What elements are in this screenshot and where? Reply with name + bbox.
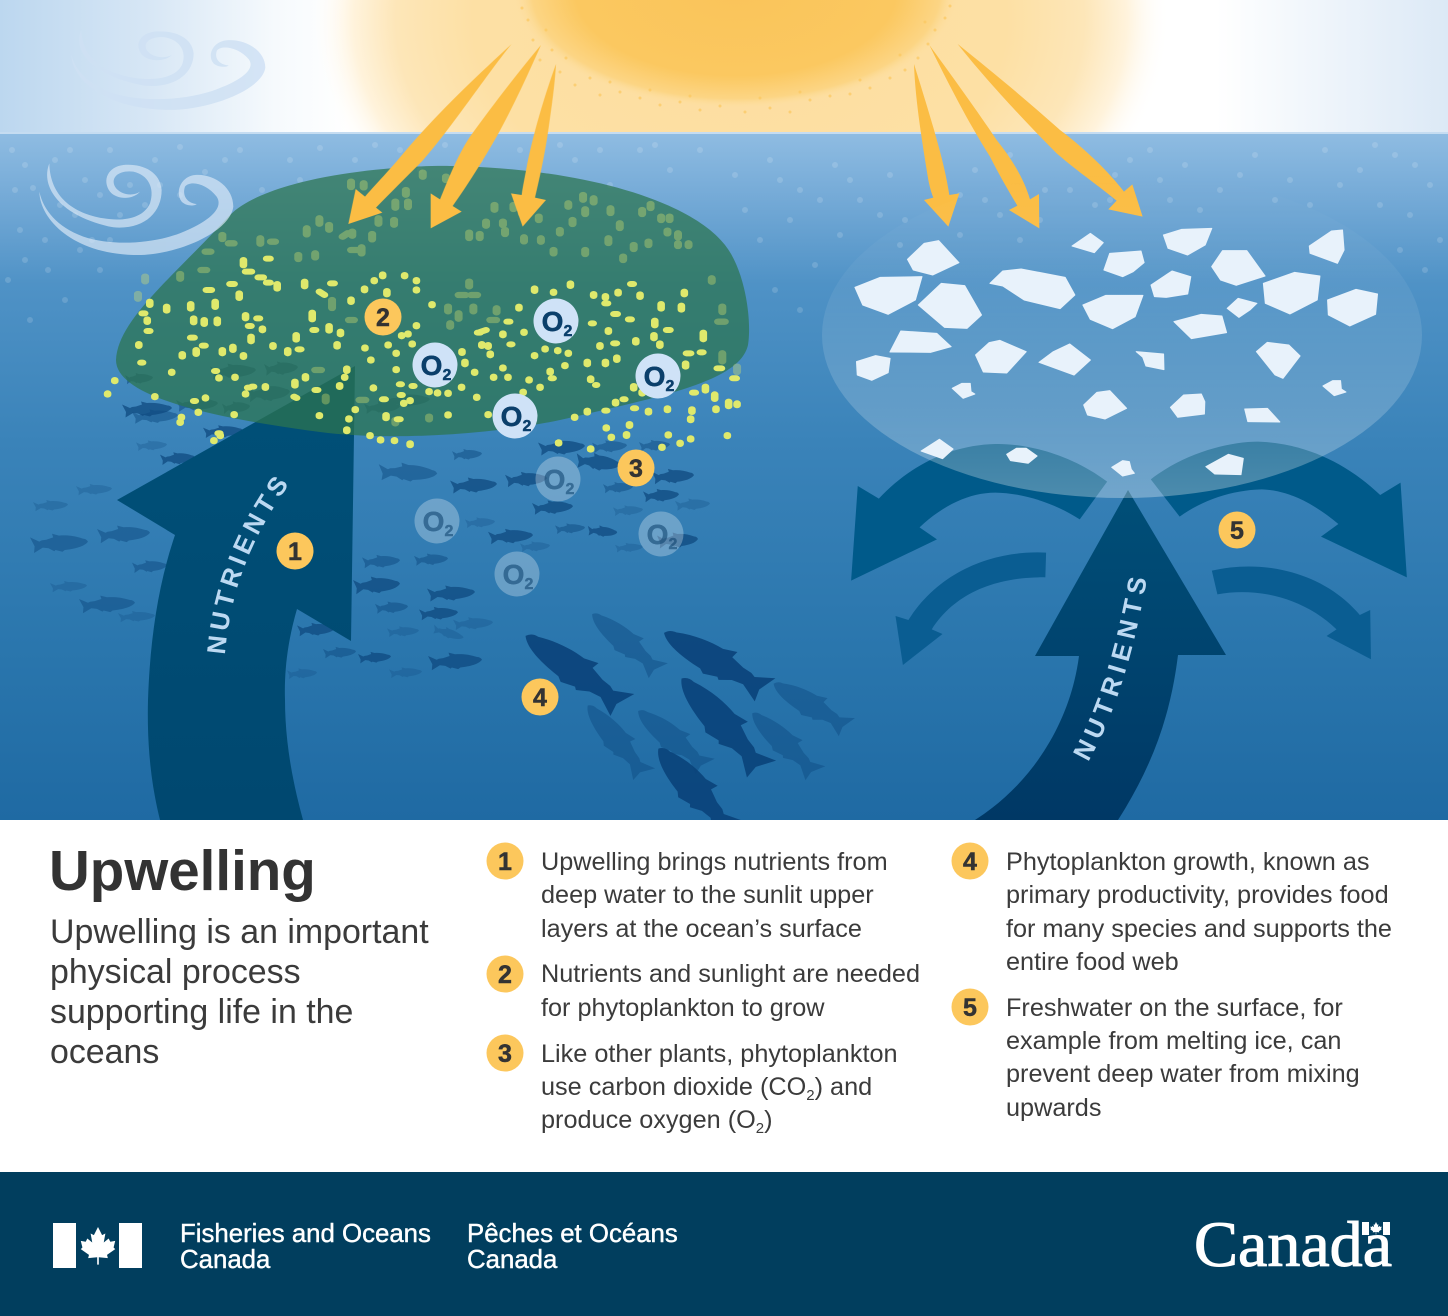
arrow: surface current to the left: [851, 444, 1107, 581]
list item 1: 1: [498, 848, 512, 876]
list item 2: for phytoplankton to grow: [541, 994, 825, 1022]
oxygen bubble: [412, 342, 458, 388]
list item 4: for many species and supports the: [1006, 915, 1392, 943]
faint fish: [33, 440, 710, 679]
phytoplankton bloom: [116, 166, 749, 436]
faded oxygen bubble: 2: [444, 523, 453, 540]
list item 1: Upwelling brings nutrients from: [541, 848, 888, 876]
badge 2: [364, 298, 402, 336]
faded oxygen bubble: [536, 456, 580, 502]
dim plankton: [138, 173, 737, 423]
arrow: surface current to the right: [1151, 442, 1407, 577]
ice floes: [855, 228, 1377, 476]
oxygen bubble: [492, 394, 538, 438]
sea: [0, 133, 1448, 820]
badge 4: 4: [533, 684, 547, 712]
badge 5: 5: [1230, 517, 1244, 545]
arrow: lower current to the right: [1212, 566, 1371, 659]
wind swirl over the water: [39, 163, 233, 255]
intro text: supporting life in the: [50, 993, 353, 1031]
freshwater lens: [822, 265, 1422, 498]
list item 1: deep water to the sunlit upper: [541, 881, 874, 909]
intro text: oceans: [50, 1033, 159, 1071]
list item 1: [486, 842, 888, 943]
fish under the plankton bloom: [125, 361, 430, 414]
list item 4: primary productivity, provides food: [1006, 881, 1389, 909]
faded oxygen bubble: 2: [524, 576, 533, 593]
list item 3: produce oxygen (O: [541, 1106, 756, 1134]
list item 4: [952, 842, 1392, 976]
badge 1: 1: [288, 538, 302, 566]
faded oxygen bubble: [414, 498, 460, 544]
badge 4: [522, 678, 558, 716]
faded oxygen bubble: O: [647, 519, 668, 550]
badge 3: 3: [629, 455, 643, 483]
horizon line: [0, 132, 1448, 134]
list item 5: Freshwater on the surface, for: [1006, 994, 1343, 1022]
faded oxygen bubble: 2: [565, 481, 574, 498]
faded oxygen bubble: [494, 552, 540, 596]
faded oxygen bubble: O: [503, 559, 524, 590]
list item 5: prevent deep water from mixing: [1006, 1060, 1360, 1088]
faded oxygen bubble: O: [423, 506, 444, 537]
oxygen bubble: 2: [522, 418, 531, 435]
badge 1: [276, 532, 314, 570]
oxygen bubble: 2: [563, 323, 572, 340]
sky: [0, 0, 1448, 134]
list item 3: 2: [806, 1087, 815, 1104]
list item 2: Nutrients and sunlight are needed: [541, 960, 920, 988]
intro text: physical process: [50, 953, 301, 991]
list item 4: Phytoplankton growth, known as: [1006, 848, 1370, 876]
pale large fish: [588, 614, 854, 780]
plankton dots: [108, 173, 737, 450]
list item 5: [952, 988, 1360, 1122]
dark large fish: [526, 631, 776, 820]
oxygen bubble: [636, 354, 680, 398]
badge 3: [618, 450, 654, 486]
badge 2: 2: [376, 304, 390, 332]
sea surface speckle: [8, 145, 1440, 320]
faded oxygen bubble: O: [544, 464, 565, 495]
sun rays, left: [348, 44, 556, 228]
list item 3: 2: [756, 1120, 764, 1137]
ray 2: [431, 45, 541, 228]
fading oxygen bubble group: [414, 456, 684, 596]
arrow: nutrients rising on left: [117, 366, 355, 820]
mid-tone fish: [30, 409, 670, 658]
schools of small fish: [30, 361, 710, 679]
oxygen bubble: O: [421, 350, 442, 381]
text panel background: [0, 820, 1448, 1172]
faded oxygen bubble: 2: [668, 536, 677, 553]
list item 2: 2: [498, 961, 512, 989]
label: nutrients left: NUTRIENTS: [207, 477, 287, 654]
wind swirl in the sky: [154, 32, 266, 110]
sun rays, right: [914, 44, 1143, 228]
ray 6: [958, 44, 1143, 217]
large fish, near school: [526, 614, 854, 820]
bright plankton: [108, 259, 737, 450]
ray 4: [914, 64, 959, 227]
intro text: Upwelling is an important: [50, 913, 429, 951]
list item 3: use carbon dioxide (CO: [541, 1073, 806, 1101]
flag symbol: [53, 1223, 142, 1268]
list item 5: 5: [963, 994, 977, 1022]
illustration: ocean scene: [0, 0, 1448, 820]
list item 4: 4: [963, 848, 977, 876]
list item 3: ) and: [815, 1073, 872, 1101]
oxygen bubble: 2: [665, 378, 674, 395]
Canada wordmark: Canada: [1194, 1209, 1392, 1281]
oxygen bubble: O: [501, 401, 522, 432]
mixing-current arrows: [851, 442, 1407, 665]
ray 5: [929, 45, 1039, 228]
oxygen bubble: [534, 298, 578, 344]
title: Upwelling: [49, 839, 316, 902]
department name, English: Fisheries and Oceans: [180, 1220, 431, 1248]
department name, French: Canada: [467, 1246, 558, 1274]
list item 4: entire food web: [1006, 948, 1179, 976]
department name, English: Canada: [180, 1246, 271, 1274]
footer band: [0, 1172, 1448, 1316]
list item 2: [486, 956, 920, 1022]
list item 3: [486, 1034, 898, 1137]
list item 1: layers at the ocean’s surface: [541, 915, 862, 943]
list item 3: 3: [498, 1040, 512, 1068]
oxygen bubble: 2: [442, 367, 451, 384]
oxygen bubble: O: [644, 361, 665, 392]
list item 5: example from melting ice, can: [1006, 1027, 1341, 1055]
department name, French: Pêches et Océans: [467, 1220, 678, 1248]
list item 5: upwards: [1006, 1094, 1101, 1122]
sun: [332, 0, 1150, 132]
dark fish: [122, 402, 698, 670]
badge 5: [1218, 512, 1256, 548]
faded oxygen bubble: [638, 512, 684, 556]
oxygen bubble: O: [542, 306, 563, 337]
label: nutrients right: NUTRIENTS: [1073, 578, 1146, 761]
list item 3: ): [764, 1106, 773, 1134]
ray 3: [511, 64, 556, 227]
list item 3: Like other plants, phytoplankton: [541, 1040, 898, 1068]
ray 1: [348, 44, 512, 224]
oxygen bubble group in bloom: [412, 298, 680, 438]
arrow: lower current to the left: [896, 552, 1046, 665]
arrow: nutrients rising on right: [975, 490, 1226, 820]
